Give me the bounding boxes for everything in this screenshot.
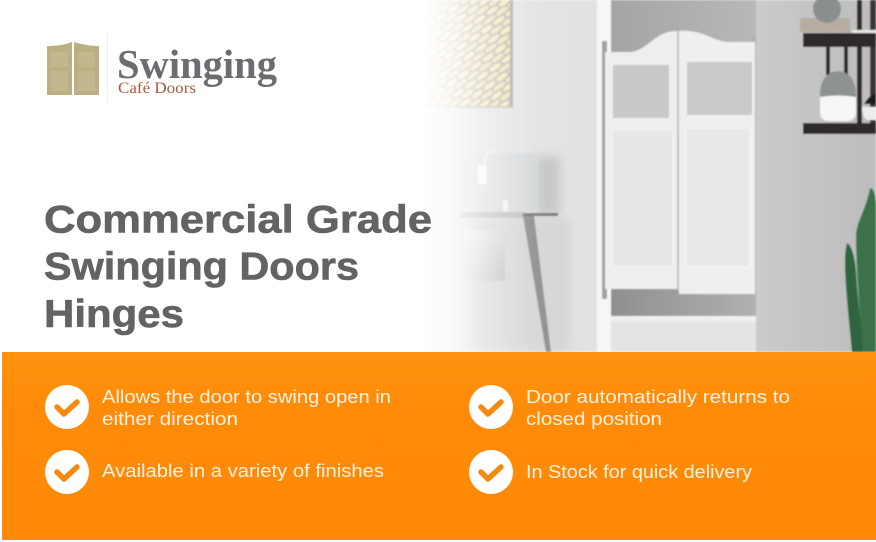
plant <box>845 188 876 352</box>
logo icon: cafe doors <box>47 42 99 95</box>
saloon doors <box>602 31 756 310</box>
headline: Hinges <box>44 293 184 336</box>
door jamb <box>597 0 612 352</box>
feature: automatic return <box>469 385 790 429</box>
feature: finishes <box>45 450 384 494</box>
shelves with vase <box>800 0 876 134</box>
feature: automatic return: Door automatically returns to <box>526 387 790 407</box>
feature: swing direction: Allows the door to swing open in <box>102 387 391 407</box>
right door leaf <box>679 31 755 294</box>
left door leaf <box>605 31 677 289</box>
orange feature panel <box>2 352 876 540</box>
feature: in stock: In Stock for quick delivery <box>526 462 752 482</box>
feature: swing direction <box>45 385 391 429</box>
side table with object <box>444 152 570 352</box>
logo wordmark: Swinging <box>117 41 277 87</box>
logo tagline: Café Doors <box>118 80 196 97</box>
logo <box>47 33 277 103</box>
right wall <box>756 0 876 352</box>
feature: swing direction: either direction <box>102 409 238 429</box>
headline <box>44 198 432 336</box>
feature: in stock <box>469 450 752 494</box>
feature: finishes: Available in a variety of finishes <box>102 461 384 481</box>
left white fade <box>400 0 575 352</box>
door opening <box>611 0 756 352</box>
feature: automatic return: closed position <box>526 409 662 429</box>
background photo: room with cafe door <box>400 0 876 352</box>
headline: Swinging Doors <box>44 246 359 288</box>
wall art <box>425 0 513 108</box>
headline: Commercial Grade <box>44 198 432 242</box>
